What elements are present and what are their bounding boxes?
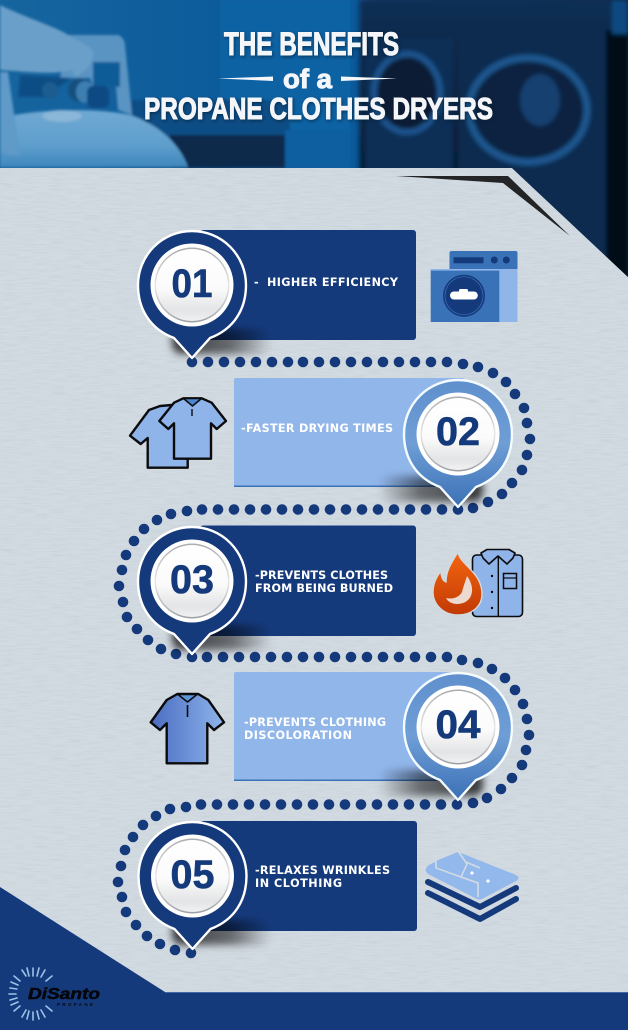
- icon: stacked shirts: [426, 851, 518, 919]
- step 03: [138, 526, 416, 654]
- title: [144, 26, 493, 126]
- pin 03: 03: [170, 558, 214, 602]
- pin 02: [404, 380, 512, 507]
- shadow 04: [378, 770, 483, 796]
- shadow 02: [378, 476, 483, 502]
- title line 2: of a: [283, 64, 333, 94]
- shadow 03: [172, 625, 272, 650]
- logo: DiSanto Propane: [9, 968, 100, 1020]
- pin 01: 01: [172, 262, 212, 306]
- step 04: [234, 672, 512, 800]
- pin 03: [138, 527, 246, 654]
- pin 04: [404, 673, 512, 800]
- header photo: propane tank and washers: [0, 0, 628, 290]
- step 02: [234, 378, 512, 507]
- card 05: [200, 821, 417, 931]
- logo subtitle: PROPANE: [57, 1002, 93, 1007]
- icon: washing machine: [431, 251, 518, 322]
- text 03: -PREVENTS CLOTHES: [255, 569, 388, 582]
- card 03: [200, 526, 416, 636]
- shadow 05: [172, 920, 272, 945]
- text 04: -PREVENTS CLOTHING: [244, 716, 386, 729]
- title rules: [218, 76, 397, 81]
- text 05: IN CLOTHING: [255, 877, 342, 890]
- shadow 01: [172, 329, 272, 354]
- pin 05: 05: [170, 853, 214, 897]
- footer band and corner: [0, 887, 628, 1030]
- step 01: [138, 230, 416, 358]
- logo wordmark: DiSanto: [28, 986, 100, 1003]
- logo burst: [9, 968, 52, 1020]
- text 01: -: [254, 276, 259, 289]
- text 04: DISCOLORATION: [244, 729, 352, 742]
- title line 1: THE BENEFITS: [224, 26, 399, 62]
- step 05: [138, 821, 417, 949]
- pin 01: [138, 231, 246, 358]
- pin 04: 04: [436, 703, 481, 747]
- pin 02: 02: [436, 410, 480, 454]
- text 03: FROM BEING BURNED: [255, 582, 393, 595]
- icon: polo shirt: [151, 694, 224, 763]
- card 04: [234, 672, 464, 781]
- text 01: HIGHER EFFICIENCY: [267, 276, 399, 289]
- black corner accent: [396, 176, 570, 236]
- pin 05: [138, 822, 246, 949]
- card 01: [200, 230, 416, 340]
- icon: two shirts: [130, 398, 226, 468]
- text 02: -FASTER DRYING TIMES: [241, 422, 393, 435]
- dotted connector path: [118, 362, 530, 953]
- card 02: [234, 378, 464, 487]
- title line 3: PROPANE CLOTHES DRYERS: [144, 91, 493, 126]
- text 05: -RELAXES WRINKLES: [255, 864, 390, 877]
- icon: flame and shirt: [433, 550, 522, 616]
